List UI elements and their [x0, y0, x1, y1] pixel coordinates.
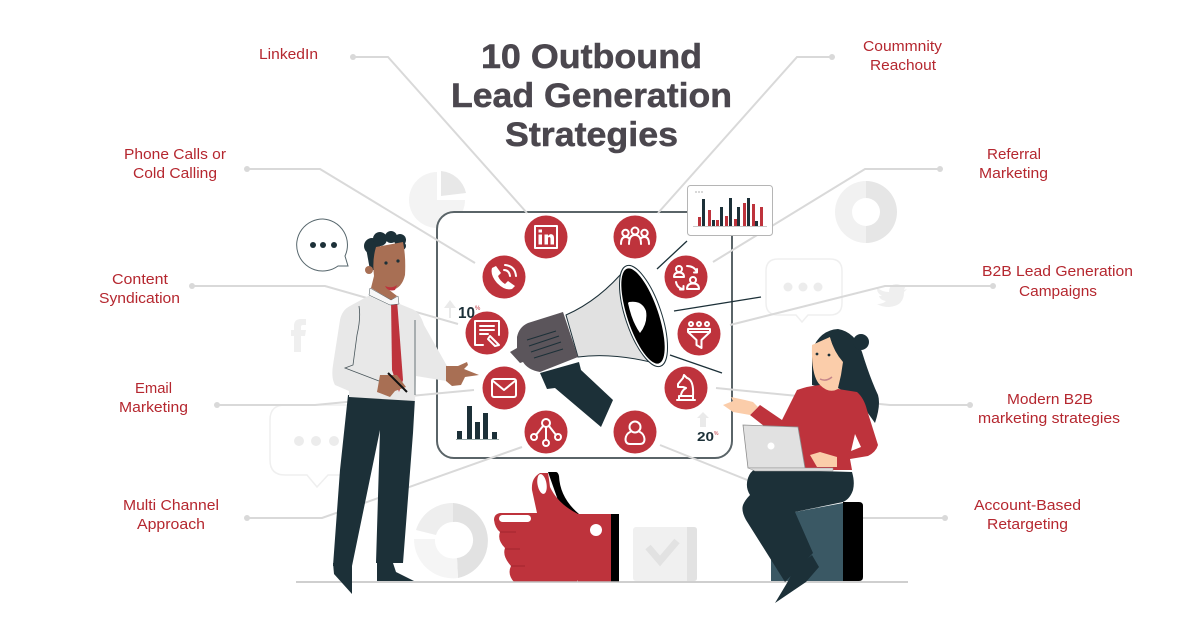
stat: 10 percent: 10 — [458, 305, 475, 322]
icon: community group — [614, 216, 656, 258]
label: Referral Marketing: Referral — [987, 146, 1041, 163]
label: Email Marketing: Email — [135, 380, 172, 397]
label: Community Reachout — [863, 38, 943, 74]
man head and neck — [365, 242, 405, 300]
label: Community Reachout: Coummnity — [863, 38, 943, 55]
label: Referral Marketing: Marketing — [979, 165, 1048, 182]
decoration: speech bubble right — [766, 259, 842, 322]
connector: B2B — [730, 283, 996, 325]
label: Referral Marketing — [979, 146, 1048, 182]
label: Multi Channel Approach: Approach — [137, 516, 205, 533]
thumbs up — [494, 472, 619, 582]
ground line — [296, 581, 908, 583]
decoration: check box — [633, 527, 697, 581]
label: Multi Channel Approach — [123, 497, 219, 533]
connector lines — [189, 54, 996, 521]
connector: Account — [660, 445, 948, 521]
label: Content Syndication — [99, 271, 180, 307]
icon: person — [614, 410, 656, 454]
label: Modern B2B marketing strategies — [978, 391, 1120, 427]
decoration: twitter bird — [876, 284, 907, 307]
icon: chess knight — [664, 366, 708, 410]
icon: mail — [482, 366, 526, 410]
man trousers — [333, 395, 415, 566]
man shoes — [333, 563, 414, 594]
label: Account-Based Retargeting — [974, 497, 1081, 533]
man shirt — [332, 295, 447, 401]
sound lines — [657, 241, 761, 373]
connector: Referral — [713, 166, 943, 262]
label: B2B Lead Generation Campaigns — [982, 263, 1133, 300]
megaphone mouth — [610, 260, 677, 372]
label: LinkedIn: LinkedIn — [259, 46, 318, 63]
decoration: facebook f — [291, 319, 306, 352]
small bar chart — [456, 406, 499, 440]
label: Email Marketing: Marketing — [119, 399, 188, 416]
title: Strategies — [505, 116, 678, 154]
icon: phone — [482, 256, 526, 298]
title: 10 Outbound — [481, 38, 702, 76]
decoration: pie chart top — [409, 171, 466, 228]
woman hair — [812, 329, 879, 423]
label: Phone Calls — [124, 146, 226, 182]
megaphone horn — [566, 267, 662, 365]
woman hand on laptop — [810, 452, 837, 467]
icon: funnel — [678, 312, 720, 356]
man hair — [364, 231, 406, 270]
label: B2B Lead Generation Campaigns: B2B Lead Generation — [982, 263, 1133, 280]
connector: Multi channel — [244, 447, 522, 521]
stat: 10 percent: % — [475, 306, 481, 312]
man collar — [369, 288, 399, 305]
woman trousers — [742, 469, 854, 582]
megaphone grip body — [510, 312, 578, 372]
woman open hand — [723, 397, 758, 415]
connector: LinkedIn — [350, 54, 527, 213]
man pointing hand — [446, 362, 479, 386]
woman shoes — [775, 555, 819, 603]
connector: Modern — [716, 388, 973, 408]
label: Email Marketing — [119, 380, 188, 416]
connector: Phone — [244, 166, 475, 263]
icon: referral swap — [664, 256, 708, 298]
icon: LinkedIn — [524, 216, 568, 258]
connector: Content — [189, 283, 458, 324]
man tie — [391, 300, 403, 392]
stool — [771, 502, 863, 581]
label: Content Syndication: Syndication — [99, 290, 180, 307]
board panel — [437, 212, 732, 458]
woman face — [812, 335, 845, 398]
background decorations — [270, 171, 907, 581]
label: Account-Based Retargeting: Account-Based — [974, 497, 1081, 514]
stat: 20 percent — [697, 412, 719, 444]
stat: 20 percent: 20 — [697, 429, 714, 444]
label: Modern B2B marketing strategies: Modern B2B — [1007, 391, 1093, 408]
woman figure — [723, 329, 879, 603]
stat: 20 percent: % — [714, 431, 719, 437]
stat: 10 percent — [444, 300, 481, 322]
chart card — [688, 186, 772, 236]
title: Lead Generation — [451, 77, 732, 115]
megaphone handle — [540, 362, 613, 427]
label: Account-Based Retargeting: Retargeting — [987, 516, 1068, 533]
label: B2B Lead Generation Campaigns: Campaigns — [1019, 283, 1097, 300]
label: Community Reachout: Reachout — [870, 57, 937, 74]
decoration: donut right — [835, 181, 897, 243]
label: Phone Calls: Phone Calls or — [124, 146, 226, 163]
icon: network — [524, 410, 568, 454]
connector: Community — [658, 54, 835, 213]
man figure — [332, 231, 479, 594]
label: Content Syndication: Content — [112, 271, 169, 288]
label: Modern B2B marketing strategies: marketing strategies — [978, 410, 1120, 427]
icon: content edit — [466, 312, 508, 354]
woman sweater — [750, 385, 878, 470]
laptop — [743, 425, 833, 471]
label: Phone Calls: Cold Calling — [133, 165, 217, 182]
man hand with pen — [377, 373, 407, 397]
label: Multi Channel Approach: Multi Channel — [123, 497, 219, 514]
decoration: speech bubble left — [270, 405, 350, 487]
speech bubble man — [297, 219, 348, 271]
title — [451, 38, 732, 154]
decoration: donut bottom — [414, 503, 488, 578]
connector: Email — [214, 390, 474, 408]
megaphone — [510, 260, 677, 427]
